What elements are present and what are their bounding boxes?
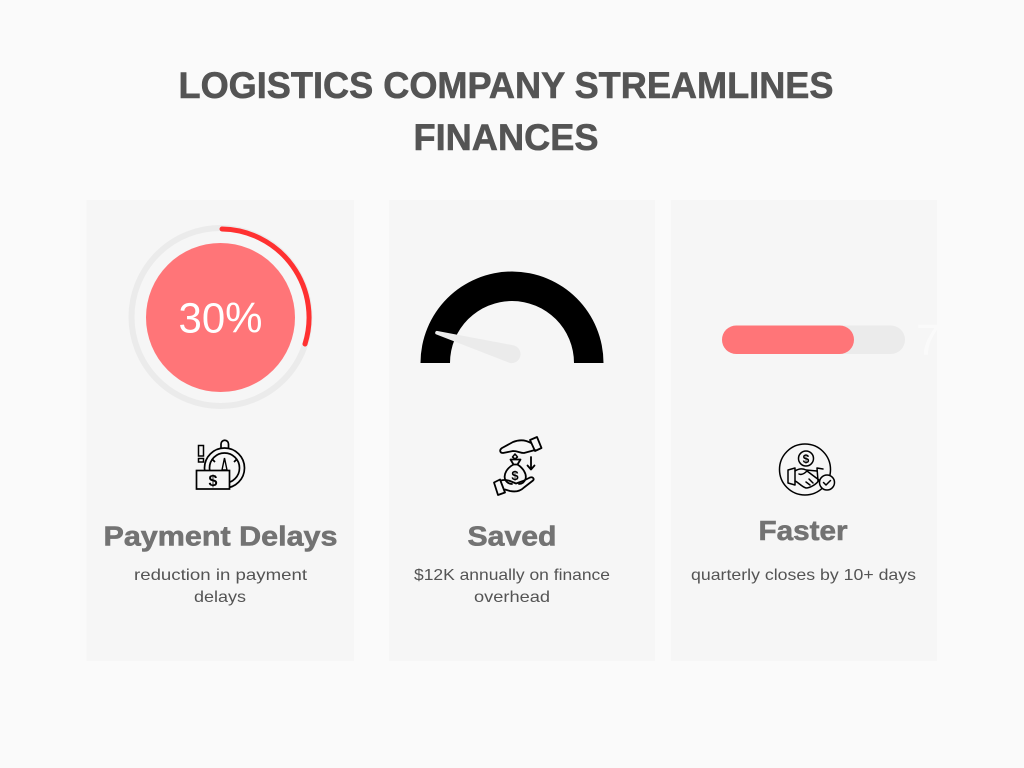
icon: handshake with coin and check [780,444,834,495]
heading: faster: Faster [758,515,848,546]
text: faster description: quarterly closes by 10+ days [691,567,916,584]
icon: hands with money bag: $ [511,468,519,483]
text: payment delays description: reduction in payment [134,567,308,584]
radial progress chart: 30% [132,228,310,406]
icon: stopwatch with dollar bill: $ [209,473,218,490]
progress bar [722,316,940,365]
title: LOGISTICS COMPANY STREAMLINES [178,65,834,106]
text: saved description [414,567,610,606]
progress bar: 7 [916,316,940,365]
panel: faster [671,200,940,661]
text: payment delays description: delays [194,589,246,606]
text: saved description: overhead [474,589,550,606]
icon: stopwatch with dollar bill [196,440,244,490]
title: FINANCES [414,117,598,158]
title [178,65,834,158]
radial progress chart: 30%: 30% [178,294,262,342]
heading: payment delays: Payment Delays [104,520,338,552]
panel: payment delays [86,200,354,661]
gauge chart [420,271,604,363]
heading: saved: Saved [468,520,556,552]
text: payment delays description [134,567,308,606]
icon: handshake with coin and check: $ [803,452,810,466]
icon: hands with money bag [494,437,542,495]
text: saved description: $12K annually on finance [414,567,610,584]
panel: saved [389,200,655,661]
